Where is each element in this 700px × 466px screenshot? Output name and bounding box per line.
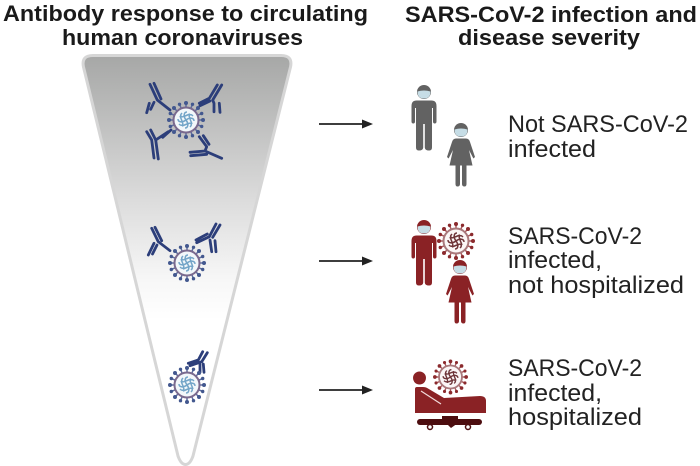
arrow: to infected, not hospitalized [319, 256, 373, 266]
arrow: to hospitalized [319, 386, 373, 394]
low antibody group: virus with one antibody [168, 352, 207, 404]
funnel: decreasing antibody response [83, 56, 291, 464]
icon: masked woman, red [446, 260, 474, 324]
text: not infected: Not SARS-CoV-2 [508, 111, 688, 138]
title: antibody response: Antibody response to circulating [3, 1, 368, 26]
text: infected, hospitalized: SARS-CoV-2 [508, 355, 642, 382]
icon: masked woman, gray [447, 123, 475, 186]
text: infected, hospitalized: hospitalized [508, 404, 642, 431]
icon: masked man, gray [412, 85, 436, 150]
arrow: to not infected [319, 120, 373, 128]
icon: masked man, red [412, 220, 436, 286]
text: not infected: infected [508, 136, 596, 163]
icon: red virus, not hospitalized [437, 222, 475, 260]
text: infected, not hospitalized: SARS-CoV-2 [508, 223, 642, 250]
text: infected, hospitalized: infected, [508, 380, 602, 407]
title: infection and severity: SARS-CoV-2 infection and [405, 2, 697, 27]
title: infection and severity: disease severity [458, 25, 640, 50]
text: infected, not hospitalized: infected, [508, 247, 602, 274]
text: infected, not hospitalized: not hospitalized [508, 272, 684, 299]
high antibody group: virus with four antibodies [147, 83, 222, 159]
medium antibody group: virus with two antibodies [148, 224, 220, 282]
title: antibody response: human coronaviruses [62, 25, 303, 50]
icon: hospital bed with patient and virus [413, 360, 486, 430]
